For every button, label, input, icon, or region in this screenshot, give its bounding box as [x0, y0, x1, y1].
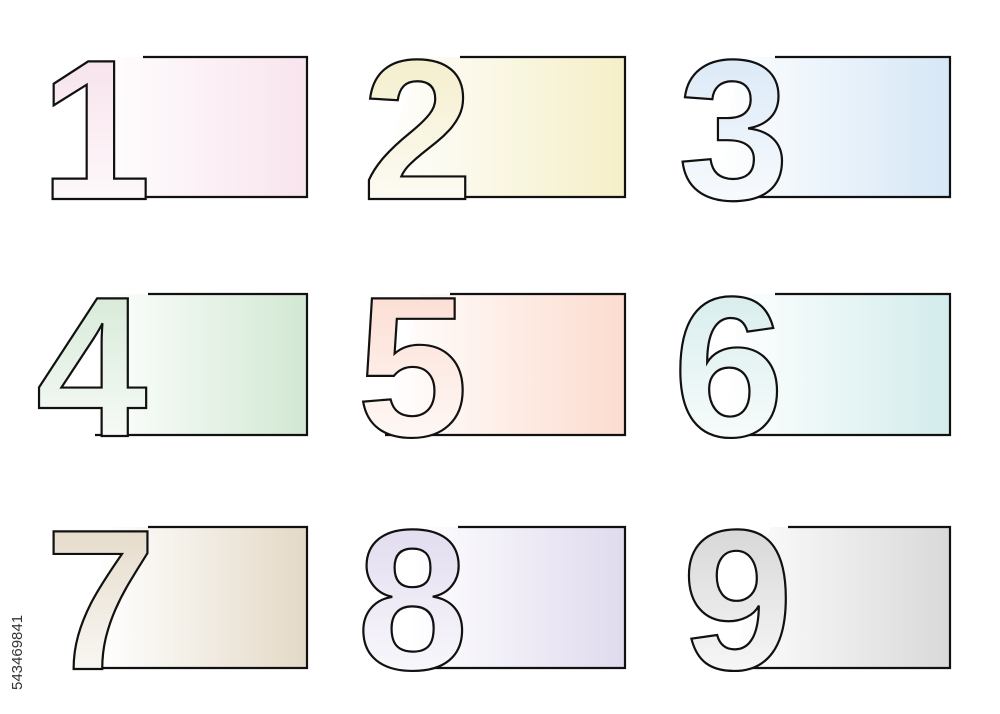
panel 4: [36, 256, 307, 479]
stock id text: 543469841: [9, 615, 26, 690]
digit 5: 5: [357, 256, 468, 479]
digit 7: 7: [45, 489, 156, 712]
panel 7: [45, 489, 307, 712]
digit 8: 8: [357, 489, 468, 712]
panel 8: [357, 489, 625, 712]
panel 2: [362, 19, 625, 242]
digit 1: 1: [40, 19, 151, 242]
digit 3: 3: [678, 19, 789, 242]
digit 2: 2: [362, 19, 473, 242]
panel 9: [682, 489, 950, 712]
panel 1: [40, 19, 307, 242]
panel 3: [678, 19, 950, 242]
digit 6: 6: [673, 256, 784, 479]
panel 6: [673, 256, 950, 479]
panel 5: [357, 256, 625, 479]
digit 4: 4: [36, 256, 147, 479]
digit 9: 9: [682, 489, 793, 712]
